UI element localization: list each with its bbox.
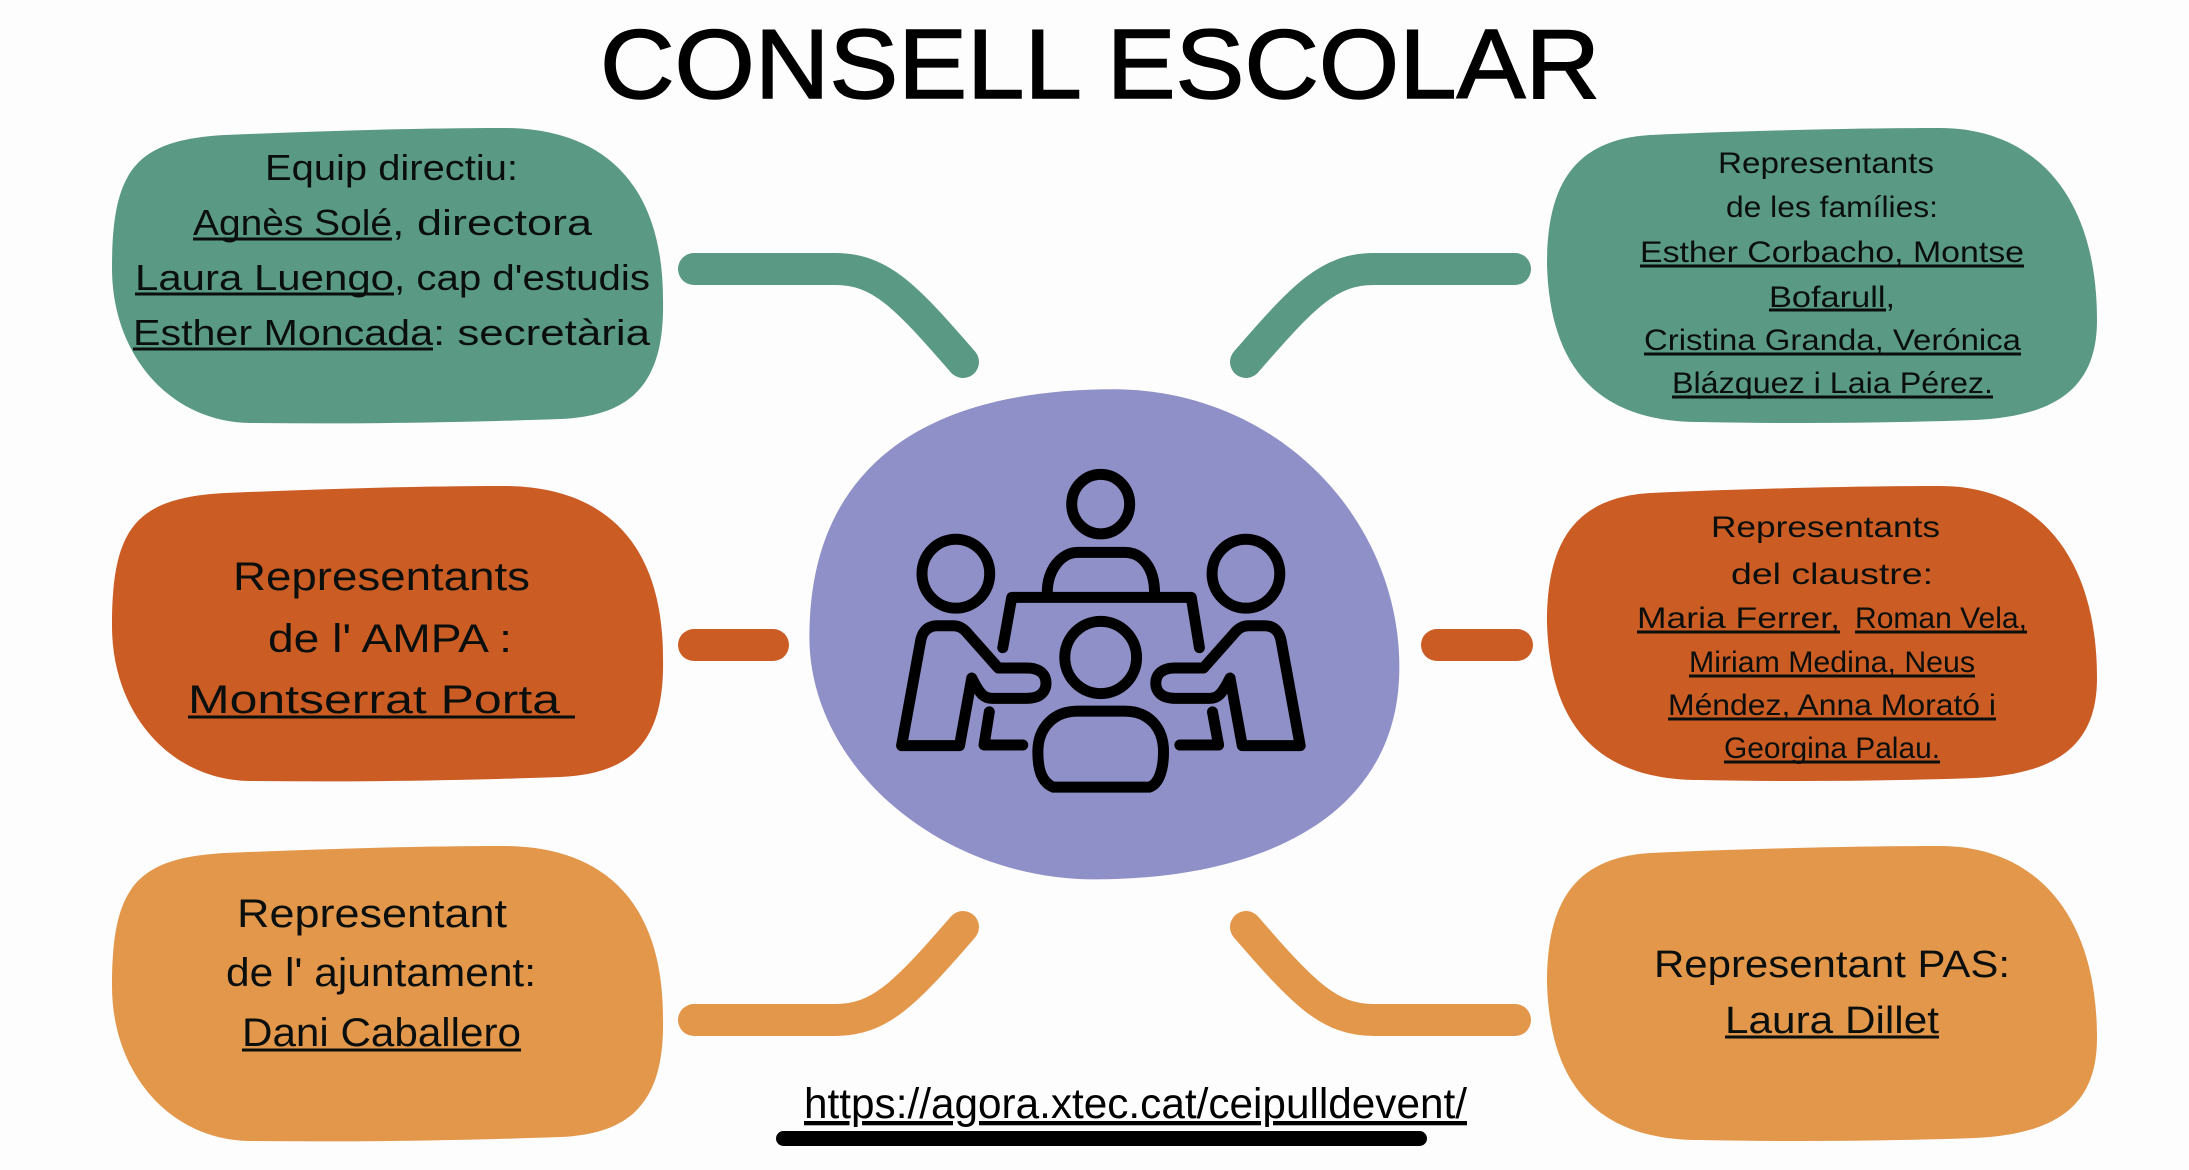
connector: bottom right	[1246, 927, 1515, 1020]
text: ajuntament: Representant	[237, 892, 507, 936]
panel: equip directiu	[112, 128, 663, 423]
connector: top right	[1246, 269, 1515, 362]
blob: AMPA	[112, 486, 663, 781]
text: equip directiu: Equip directiu:	[265, 147, 518, 188]
black bar under link	[776, 1131, 1427, 1146]
text: claustre: Méndez, Anna Morató i	[1668, 689, 1996, 722]
panel: representant PAS	[1547, 846, 2097, 1141]
connector: top left	[694, 269, 963, 362]
text: claustre: Roman Vela,	[1855, 602, 2027, 635]
panel: representants de l'AMPA	[112, 486, 663, 781]
text: PAS: Representant PAS:	[1654, 944, 2010, 986]
text: AMPA: Montserrat Porta	[188, 678, 561, 722]
text: equip directiu: , directora	[392, 202, 593, 243]
text: equip directiu	[133, 147, 651, 353]
central circle: meeting icon	[809, 389, 1399, 879]
website link: https://agora.xtec.cat/ceipulldevent/	[804, 1080, 1467, 1128]
connector: middle left	[694, 629, 773, 661]
blob: equip directiu	[112, 128, 663, 423]
connector: middle right	[1437, 629, 1517, 661]
text: famílies: de les famílies:	[1726, 191, 1938, 224]
text: AMPA: Representants	[233, 555, 530, 599]
text: famílies: Representants	[1718, 147, 1934, 180]
text: PAS: Laura Dillet	[1725, 1000, 1939, 1042]
blob: ajuntament	[112, 846, 663, 1141]
text: famílies: Blázquez i Laia Pérez.	[1672, 367, 1993, 400]
panel: representants de les famílies	[1547, 128, 2097, 423]
icon: people around a table	[902, 474, 1300, 787]
text: claustre: del claustre:	[1731, 558, 1933, 591]
text: claustre: Maria Ferrer,	[1637, 602, 1840, 635]
text: equip directiu: : secretària	[433, 312, 651, 353]
text: claustre: Representants	[1711, 511, 1940, 544]
text: ajuntament: de l' ajuntament:	[226, 951, 536, 995]
text: claustre: Georgina Palau.	[1724, 732, 1940, 765]
text: equip directiu: , cap d'estudis	[394, 257, 650, 298]
purple blob	[809, 389, 1399, 879]
blob: famílies	[1547, 128, 2097, 423]
text: famílies	[1640, 147, 2024, 400]
title: CONSELL ESCOLAR	[600, 9, 1600, 119]
text: equip directiu: Laura Luengo	[135, 257, 394, 298]
text: AMPA: de l' AMPA :	[268, 617, 512, 661]
text: AMPA	[188, 555, 575, 722]
text: equip directiu: Esther Moncada	[133, 312, 434, 353]
blob: PAS	[1547, 846, 2097, 1141]
panel: representants del claustre	[1547, 486, 2097, 781]
text: famílies: Bofarull,	[1769, 281, 1895, 314]
panel: representant de l'ajuntament	[112, 846, 663, 1141]
text: claustre	[1637, 511, 2027, 765]
blob: claustre	[1547, 486, 2097, 781]
text: equip directiu: Agnès Solé	[193, 202, 392, 243]
text: claustre: Miriam Medina, Neus	[1689, 646, 1975, 679]
text: ajuntament: Dani Caballero	[242, 1011, 521, 1055]
text: famílies: Esther Corbacho, Montse	[1640, 236, 2024, 269]
text: PAS	[1654, 944, 2010, 1042]
text: famílies: Cristina Granda, Verónica	[1644, 324, 2021, 357]
text: ajuntament	[226, 892, 536, 1055]
connector: bottom left	[694, 927, 963, 1020]
